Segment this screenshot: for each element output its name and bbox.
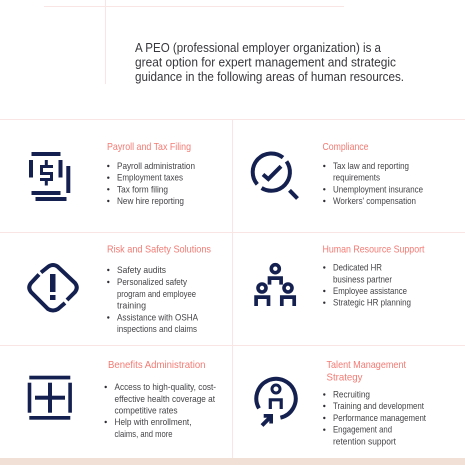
list: talent: Performance management [333, 413, 426, 423]
list: human resource support: Strategic HR planning [333, 298, 411, 308]
list: compliance: Workers' compensation [333, 196, 416, 206]
list: benefits: effective health coverage at [114, 394, 215, 404]
list: compliance: requirements [333, 173, 380, 183]
icon: magnifying glass with check [253, 153, 298, 198]
list: benefits: Access to high-quality, cost- [114, 382, 216, 392]
list: talent: Engagement and [333, 425, 392, 435]
heading: risk: Risk and Safety Solutions [107, 245, 211, 256]
panel: payroll and tax filing [29, 142, 195, 206]
list: talent: Training and development [333, 401, 424, 411]
list: payroll: Tax form filing [117, 184, 168, 194]
list: compliance [323, 161, 423, 206]
intro text: A PEO (professional employer organization) is a [135, 41, 381, 55]
list: compliance: Tax law and reporting [333, 161, 409, 171]
intro text: guidance in the following areas of human resources. [135, 70, 404, 84]
list: payroll [107, 161, 195, 206]
list: talent [323, 390, 426, 446]
footer band [0, 458, 465, 465]
list: compliance: Unemployment insurance [333, 184, 423, 194]
heading: compliance: Compliance [322, 142, 369, 153]
heading: talent management strategy: Talent Management [326, 360, 406, 371]
panel: benefits administration [28, 360, 216, 439]
list: payroll: Payroll administration [117, 161, 195, 171]
list: risk: inspections and claims [117, 324, 197, 334]
list: payroll: New hire reporting [117, 196, 184, 206]
list: risk: training [117, 301, 146, 311]
list: risk: program and employee [117, 289, 196, 299]
intro text [135, 41, 404, 84]
heading: human resource support: Human Resource Support [322, 245, 425, 256]
list: human resource support: Employee assistance [333, 286, 407, 296]
panel: talent management strategy [256, 360, 426, 446]
panel: compliance [253, 142, 423, 206]
intro text: great option for expert management and strategic [135, 56, 396, 70]
icon: framed plus [28, 376, 72, 420]
list: risk: Assistance with OSHA [117, 312, 199, 322]
list: benefits: Help with enrollment, [114, 417, 192, 427]
list: talent: Recruiting [333, 390, 370, 400]
panel: human resource support [256, 245, 425, 308]
list: human resource support [323, 262, 411, 308]
heading: payroll: Payroll and Tax Filing [107, 142, 191, 153]
list: benefits [104, 382, 216, 439]
icon: person in circular arrow [256, 379, 296, 426]
heading: talent management strategy: Strategy [326, 372, 363, 384]
icon: payroll document with dollar sign [29, 152, 70, 201]
icon: org chart [256, 265, 294, 306]
heading: benefits: Benefits Administration [108, 360, 206, 371]
list: payroll: Employment taxes [117, 173, 183, 183]
list: risk [107, 265, 199, 334]
list: human resource support: business partner [333, 274, 392, 284]
list: benefits: competitive rates [114, 406, 178, 416]
list: human resource support: Dedicated HR [333, 262, 382, 272]
panel: risk and safety solutions [29, 245, 211, 334]
list: talent: retention support [333, 436, 396, 446]
icon: warning diamond [29, 265, 77, 310]
heading: talent management strategy [326, 360, 406, 384]
list: risk: Personalized safety [117, 277, 187, 287]
list: benefits: claims, and more [114, 429, 172, 439]
list: risk: Safety audits [117, 265, 166, 275]
